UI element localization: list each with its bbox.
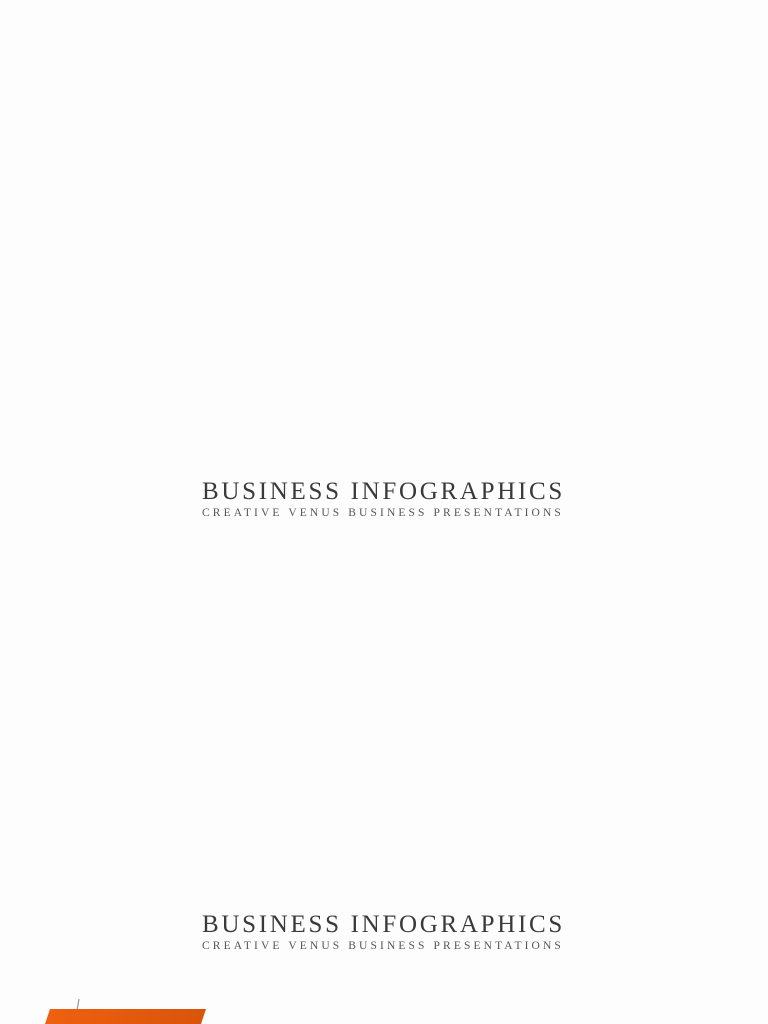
orange footer bar	[45, 998, 206, 1024]
subtitle: CREATIVE VENUS BUSINESS PRESENTATIONS	[202, 507, 564, 519]
heading: BUSINESS INFOGRAPHICS	[202, 911, 565, 938]
subtitle: CREATIVE VENUS BUSINESS PRESENTATIONS	[202, 940, 564, 952]
title block: upper	[202, 478, 565, 519]
heading: BUSINESS INFOGRAPHICS	[202, 478, 565, 505]
title block: lower	[202, 911, 565, 952]
